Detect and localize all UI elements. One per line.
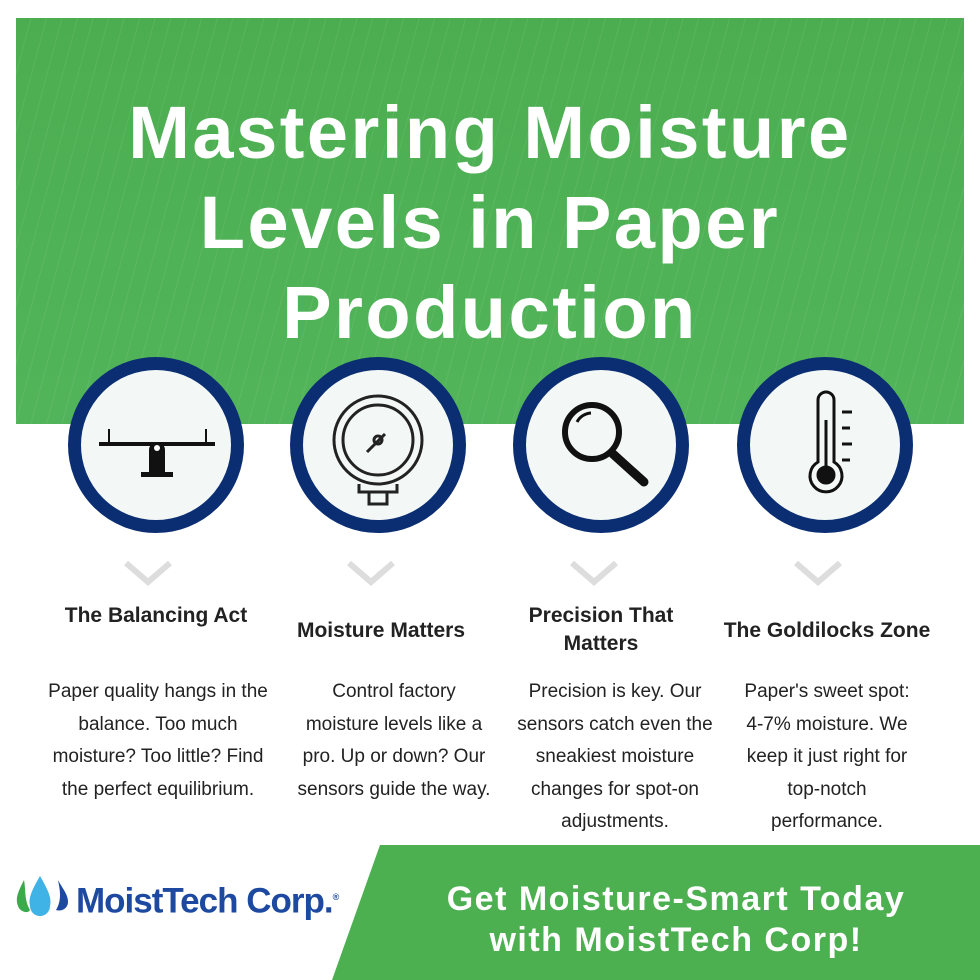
title: Levels in Paper xyxy=(200,181,780,264)
icon: seesaw xyxy=(68,357,244,533)
text 1: Paper quality hangs in the xyxy=(48,681,268,702)
heading 3: Matters xyxy=(564,632,638,655)
text 2: sensors guide the way. xyxy=(298,778,490,800)
banner background xyxy=(16,18,964,424)
text 4: 4-7% moisture. We xyxy=(746,714,908,734)
call to action text xyxy=(447,880,905,959)
text 3 xyxy=(517,681,713,832)
text 4 xyxy=(744,681,910,832)
text 2: pro. Up or down? Our xyxy=(303,746,485,767)
text 2: Control factory xyxy=(332,681,456,702)
call to action banner xyxy=(332,845,980,980)
heading 3: Precision That xyxy=(529,604,673,627)
logo: MoistTech Corp.® xyxy=(76,882,338,921)
text 4: performance. xyxy=(771,811,883,832)
text 3: changes for spot-on xyxy=(531,778,699,800)
title xyxy=(128,91,852,354)
heading 3 xyxy=(529,604,674,655)
text 4: Paper's sweet spot: xyxy=(744,681,910,702)
icon: thermometer xyxy=(737,357,913,533)
text 1: balance. Too much xyxy=(78,714,238,734)
call to action text: with MoistTech Corp! xyxy=(489,921,863,959)
title: Mastering Moisture xyxy=(128,91,852,174)
text 1 xyxy=(48,681,268,800)
text 3: Precision is key. Our xyxy=(529,681,701,702)
heading 2: Moisture Matters xyxy=(297,619,465,642)
text 2: moisture levels like a xyxy=(306,714,482,734)
text 1: moisture? Too little? Find xyxy=(53,746,263,767)
text 4: keep it just right for xyxy=(747,746,907,767)
text 1: the perfect equilibrium. xyxy=(62,778,254,800)
title: Production xyxy=(282,271,698,354)
icon: gauge xyxy=(290,357,466,533)
icon: magnifier xyxy=(513,357,689,533)
text 4: top-notch xyxy=(787,778,867,800)
heading 1: The Balancing Act xyxy=(65,604,247,627)
text 2 xyxy=(298,681,490,800)
chevrons xyxy=(124,561,842,586)
heading 4: The Goldilocks Zone xyxy=(724,619,930,642)
text 3: sensors catch even the xyxy=(517,714,713,734)
call to action text: Get Moisture-Smart Today xyxy=(447,880,905,918)
text 3: sneakiest moisture xyxy=(536,746,694,767)
text 3: adjustments. xyxy=(561,811,669,832)
